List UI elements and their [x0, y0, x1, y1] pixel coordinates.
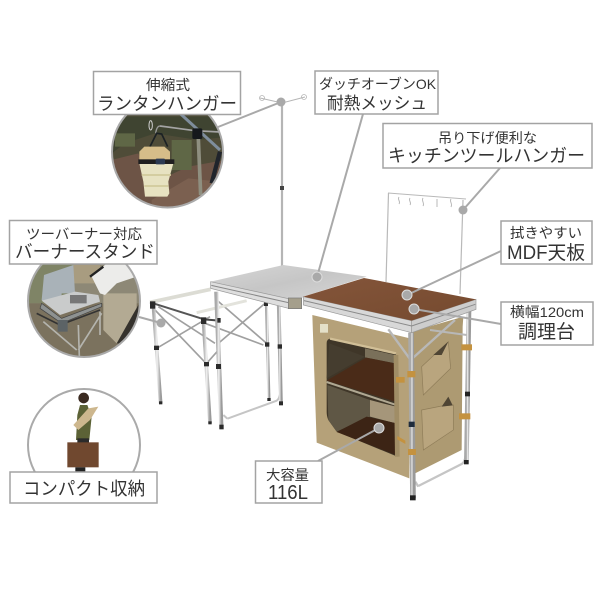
label: burner stand: ツーバーナー対応	[26, 226, 142, 242]
callout line: MDF top	[402, 251, 501, 300]
label: burner stand: バーナースタンド	[15, 242, 155, 262]
label: lantern hanger: ランタンハンガー	[97, 94, 237, 114]
label: MDF top: MDF天板	[507, 242, 585, 264]
product: folding kitchen table	[150, 265, 476, 500]
label: cooking table: 横幅120cm	[510, 304, 584, 320]
label: cooking table: 調理台	[518, 321, 575, 343]
cabinet	[312, 315, 463, 478]
label: cooking table	[501, 302, 593, 345]
label: MDF top: 拭きやすい	[510, 225, 582, 241]
right legs and straps	[388, 310, 472, 500]
wood table top	[303, 278, 476, 333]
mesh table top	[211, 265, 367, 309]
label: capacity: 大容量	[266, 467, 309, 483]
main table legs	[216, 292, 283, 429]
label: capacity	[256, 461, 322, 504]
label: lantern hanger	[94, 72, 240, 114]
label: heat-resistant mesh: 耐熱メッシュ	[327, 94, 427, 113]
label: MDF top	[501, 221, 592, 264]
label: kitchen tool hanger	[383, 124, 592, 168]
photo circle: burner stand	[27, 264, 141, 358]
label: lantern hanger: 伸縮式	[146, 77, 190, 93]
icon: kitchen tool hanger	[386, 193, 466, 294]
label: kitchen tool hanger: キッチンツールハンガー	[388, 146, 585, 166]
label: heat-resistant mesh: ダッチオーブンOK	[319, 76, 437, 92]
photo circle: lantern	[111, 115, 224, 208]
callout line: cooking table	[409, 304, 501, 324]
callout line: heat-resistant mesh	[312, 114, 363, 282]
callout line: kitchen tool hanger	[458, 168, 500, 214]
callout line: capacity	[318, 423, 384, 461]
callout line: burner stand	[139, 317, 166, 328]
photo circle: compact storage	[28, 389, 140, 501]
label: burner stand	[10, 220, 157, 264]
label: heat-resistant mesh	[315, 71, 438, 114]
label: kitchen tool hanger: 吊り下げ便利な	[438, 130, 537, 146]
label: compact storage: コンパクト収納	[23, 479, 145, 499]
label: capacity: 116L	[268, 482, 308, 504]
callout line: lantern hanger	[218, 98, 286, 127]
side table	[150, 289, 267, 424]
icon: lantern hanger pole	[260, 94, 306, 270]
label: compact storage	[10, 472, 157, 503]
